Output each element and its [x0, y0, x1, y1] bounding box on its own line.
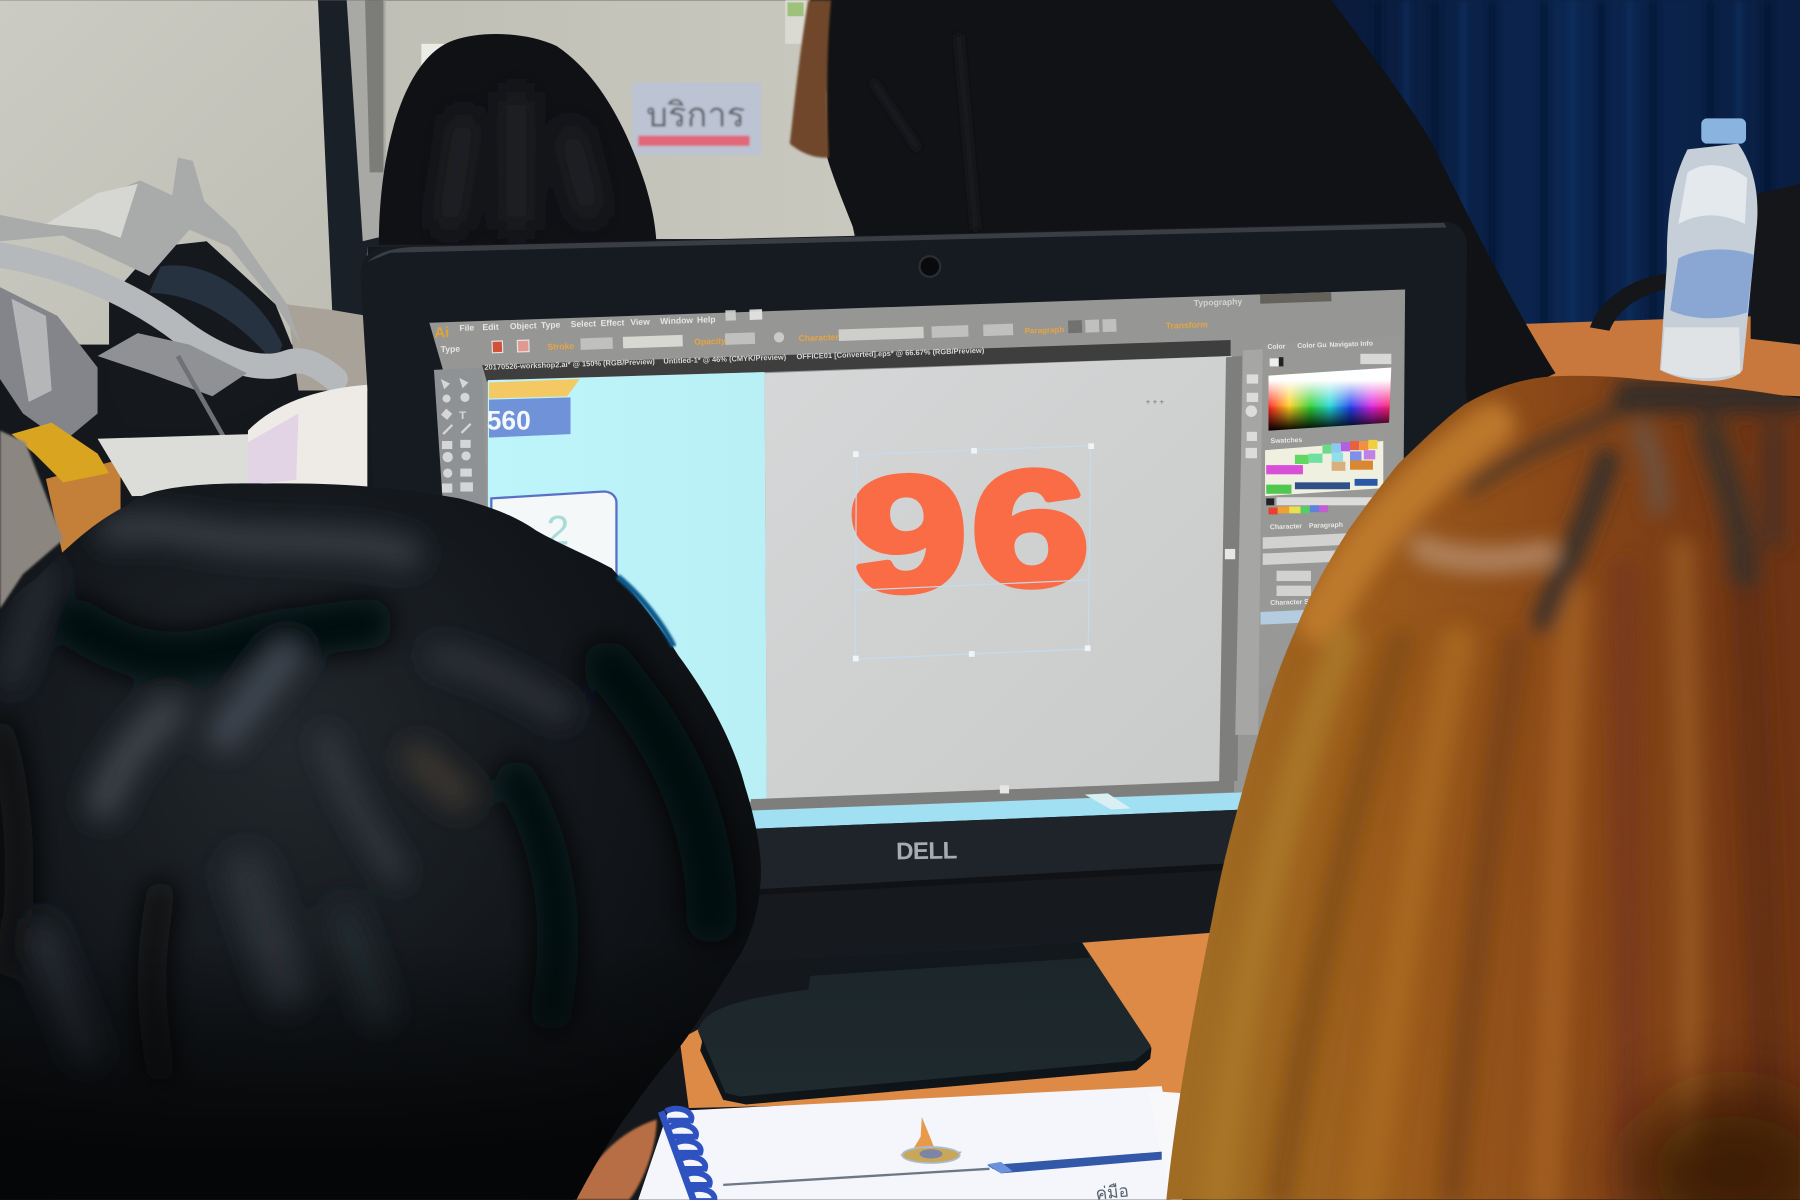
Illustrator menu bar and control bar: View	[630, 316, 650, 327]
spiral notebook	[638, 1086, 1182, 1200]
blue 560 label	[487, 397, 571, 438]
silver bag at left	[0, 157, 335, 488]
water bottle	[1660, 118, 1757, 381]
person in black coat	[827, 0, 1555, 413]
big number 96 in coral: 6	[968, 436, 1092, 622]
cyan artboard	[488, 372, 767, 804]
tools panel	[434, 368, 487, 508]
big number 96 in coral: 9	[846, 442, 970, 627]
document tabs and ruler: Untitled-1* @ 46% (CMYK/Preview)	[663, 352, 787, 366]
panel tabs: Color, Color Guide, Swatches: Info	[1360, 341, 1373, 348]
dark helmet-like interior	[109, 241, 301, 431]
small marks on canvas: + + +	[1146, 397, 1164, 406]
coat fold highlights	[872, 35, 976, 230]
Illustrator menu bar and control bar: Ai	[434, 324, 450, 342]
panel tabs: Color, Color Guide, Swatches: Color	[1267, 343, 1286, 351]
grey canvas artboard	[765, 356, 1232, 799]
brown hair strand of person in coat	[790, 0, 831, 158]
Illustrator menu bar and control bar	[434, 290, 1332, 356]
webcam	[920, 256, 940, 277]
panel tabs: Color, Color Guide, Swatches: Character	[1270, 523, 1303, 531]
Illustrator menu bar and control bar: File	[459, 322, 475, 333]
Illustrator menu bar and control bar: Character	[798, 332, 840, 343]
document tabs and ruler: 20170526-workshop2.ai* @ 150% (RGB/Preview)	[484, 357, 655, 372]
document tabs and ruler	[482, 340, 1231, 381]
emblem on notebook	[900, 1117, 962, 1163]
woman with black hair at back	[379, 34, 657, 245]
rear monitor	[318, 0, 872, 326]
monitor chin with DELL logo: DELL	[896, 837, 957, 865]
Illustrator menu bar and control bar: Object	[510, 320, 537, 331]
Illustrator menu bar and control bar: Effect	[600, 317, 625, 328]
panel tabs: Color, Color Guide, Swatches: Swatches	[1270, 437, 1303, 445]
Illustrator menu bar and control bar: Select	[571, 318, 596, 329]
silver strap	[0, 255, 335, 379]
colour spectrum picker	[1268, 368, 1391, 431]
Illustrator menu bar and control bar: Opacity	[694, 336, 726, 347]
back hair sheen	[448, 92, 591, 230]
Illustrator menu bar and control bar: Help	[697, 314, 716, 325]
notebook cover stripes	[723, 1164, 1039, 1185]
panel tabs: Color, Color Guide, Swatches: Navigato	[1329, 341, 1359, 349]
spiral binding	[666, 1109, 714, 1200]
Illustrator menu bar and control bar: Transform	[1166, 319, 1208, 331]
swatches grid	[1265, 440, 1383, 514]
bottle cap	[1701, 118, 1746, 144]
right side panels	[1235, 335, 1403, 735]
Illustrator menu bar and control bar: Type	[541, 320, 561, 330]
panel tabs: Color, Color Guide, Swatches: Paragraph	[1309, 522, 1343, 530]
cluttered desk items behind bag	[287, 304, 367, 390]
skin of foreground person	[574, 1119, 657, 1200]
Illustrator menu bar and control bar: Paragraph	[1024, 325, 1065, 336]
monitor stand base	[698, 942, 1151, 1105]
rear monitor on-screen label: บริการ	[646, 96, 745, 134]
wall background	[0, 0, 367, 345]
rear monitor on-screen label	[633, 83, 761, 155]
foreground person: dark hair	[0, 477, 769, 1200]
yellow tag on artboard	[489, 379, 580, 399]
Illustrator menu bar and control bar: Stroke	[547, 341, 574, 352]
soft dark hair highlights and swirl	[0, 527, 712, 1068]
selection box around number	[853, 443, 1094, 661]
monitor bezel	[360, 222, 1467, 962]
Illustrator menu bar and control bar: Window	[660, 315, 694, 326]
soft orange hair strands	[1217, 396, 1800, 1194]
dark shadow at lower right of hair	[1630, 1091, 1800, 1200]
Illustrator menu bar and control bar: Typography	[1194, 296, 1243, 308]
monitor chin with DELL logo	[735, 810, 1247, 962]
screen	[429, 289, 1405, 831]
canvas scrollbars	[751, 356, 1242, 811]
big number 96 in coral	[846, 436, 1092, 627]
dark lower fade of head	[0, 982, 689, 1200]
white rounded card	[491, 492, 616, 574]
panel tabs: Color, Color Guide, Swatches	[1262, 341, 1382, 607]
wooden desk	[680, 932, 1217, 1108]
blue glasses strap reflection	[618, 576, 674, 646]
tools panel: T	[459, 410, 466, 422]
white rounded card: 2	[546, 507, 569, 553]
blue 560 label: 560	[487, 406, 531, 436]
table at back right	[1521, 315, 1800, 396]
dark equipment and cable at right	[1590, 184, 1800, 345]
silver bag panels	[0, 157, 301, 345]
blue curtain	[1326, 0, 1800, 327]
papers and table at left	[11, 385, 367, 557]
character panel fields	[1260, 533, 1355, 625]
Illustrator menu bar and control bar: Edit	[482, 322, 499, 332]
foreground person: orange-brown hair	[1159, 368, 1800, 1200]
document tabs and ruler: OFFICE01 [Converted].eps* @ 66.67% (RGB/Preview)	[796, 346, 985, 361]
panel tabs: Color, Color Guide, Swatches: Color Gu	[1297, 342, 1327, 350]
patterned fabric at left edge	[0, 431, 63, 609]
main monitor	[360, 222, 1467, 962]
panel tabs: Color, Color Guide, Swatches: Character Styles	[1270, 598, 1325, 607]
Illustrator menu bar and control bar: Type	[440, 344, 460, 354]
blue desktop taskbar strip	[748, 792, 1247, 831]
